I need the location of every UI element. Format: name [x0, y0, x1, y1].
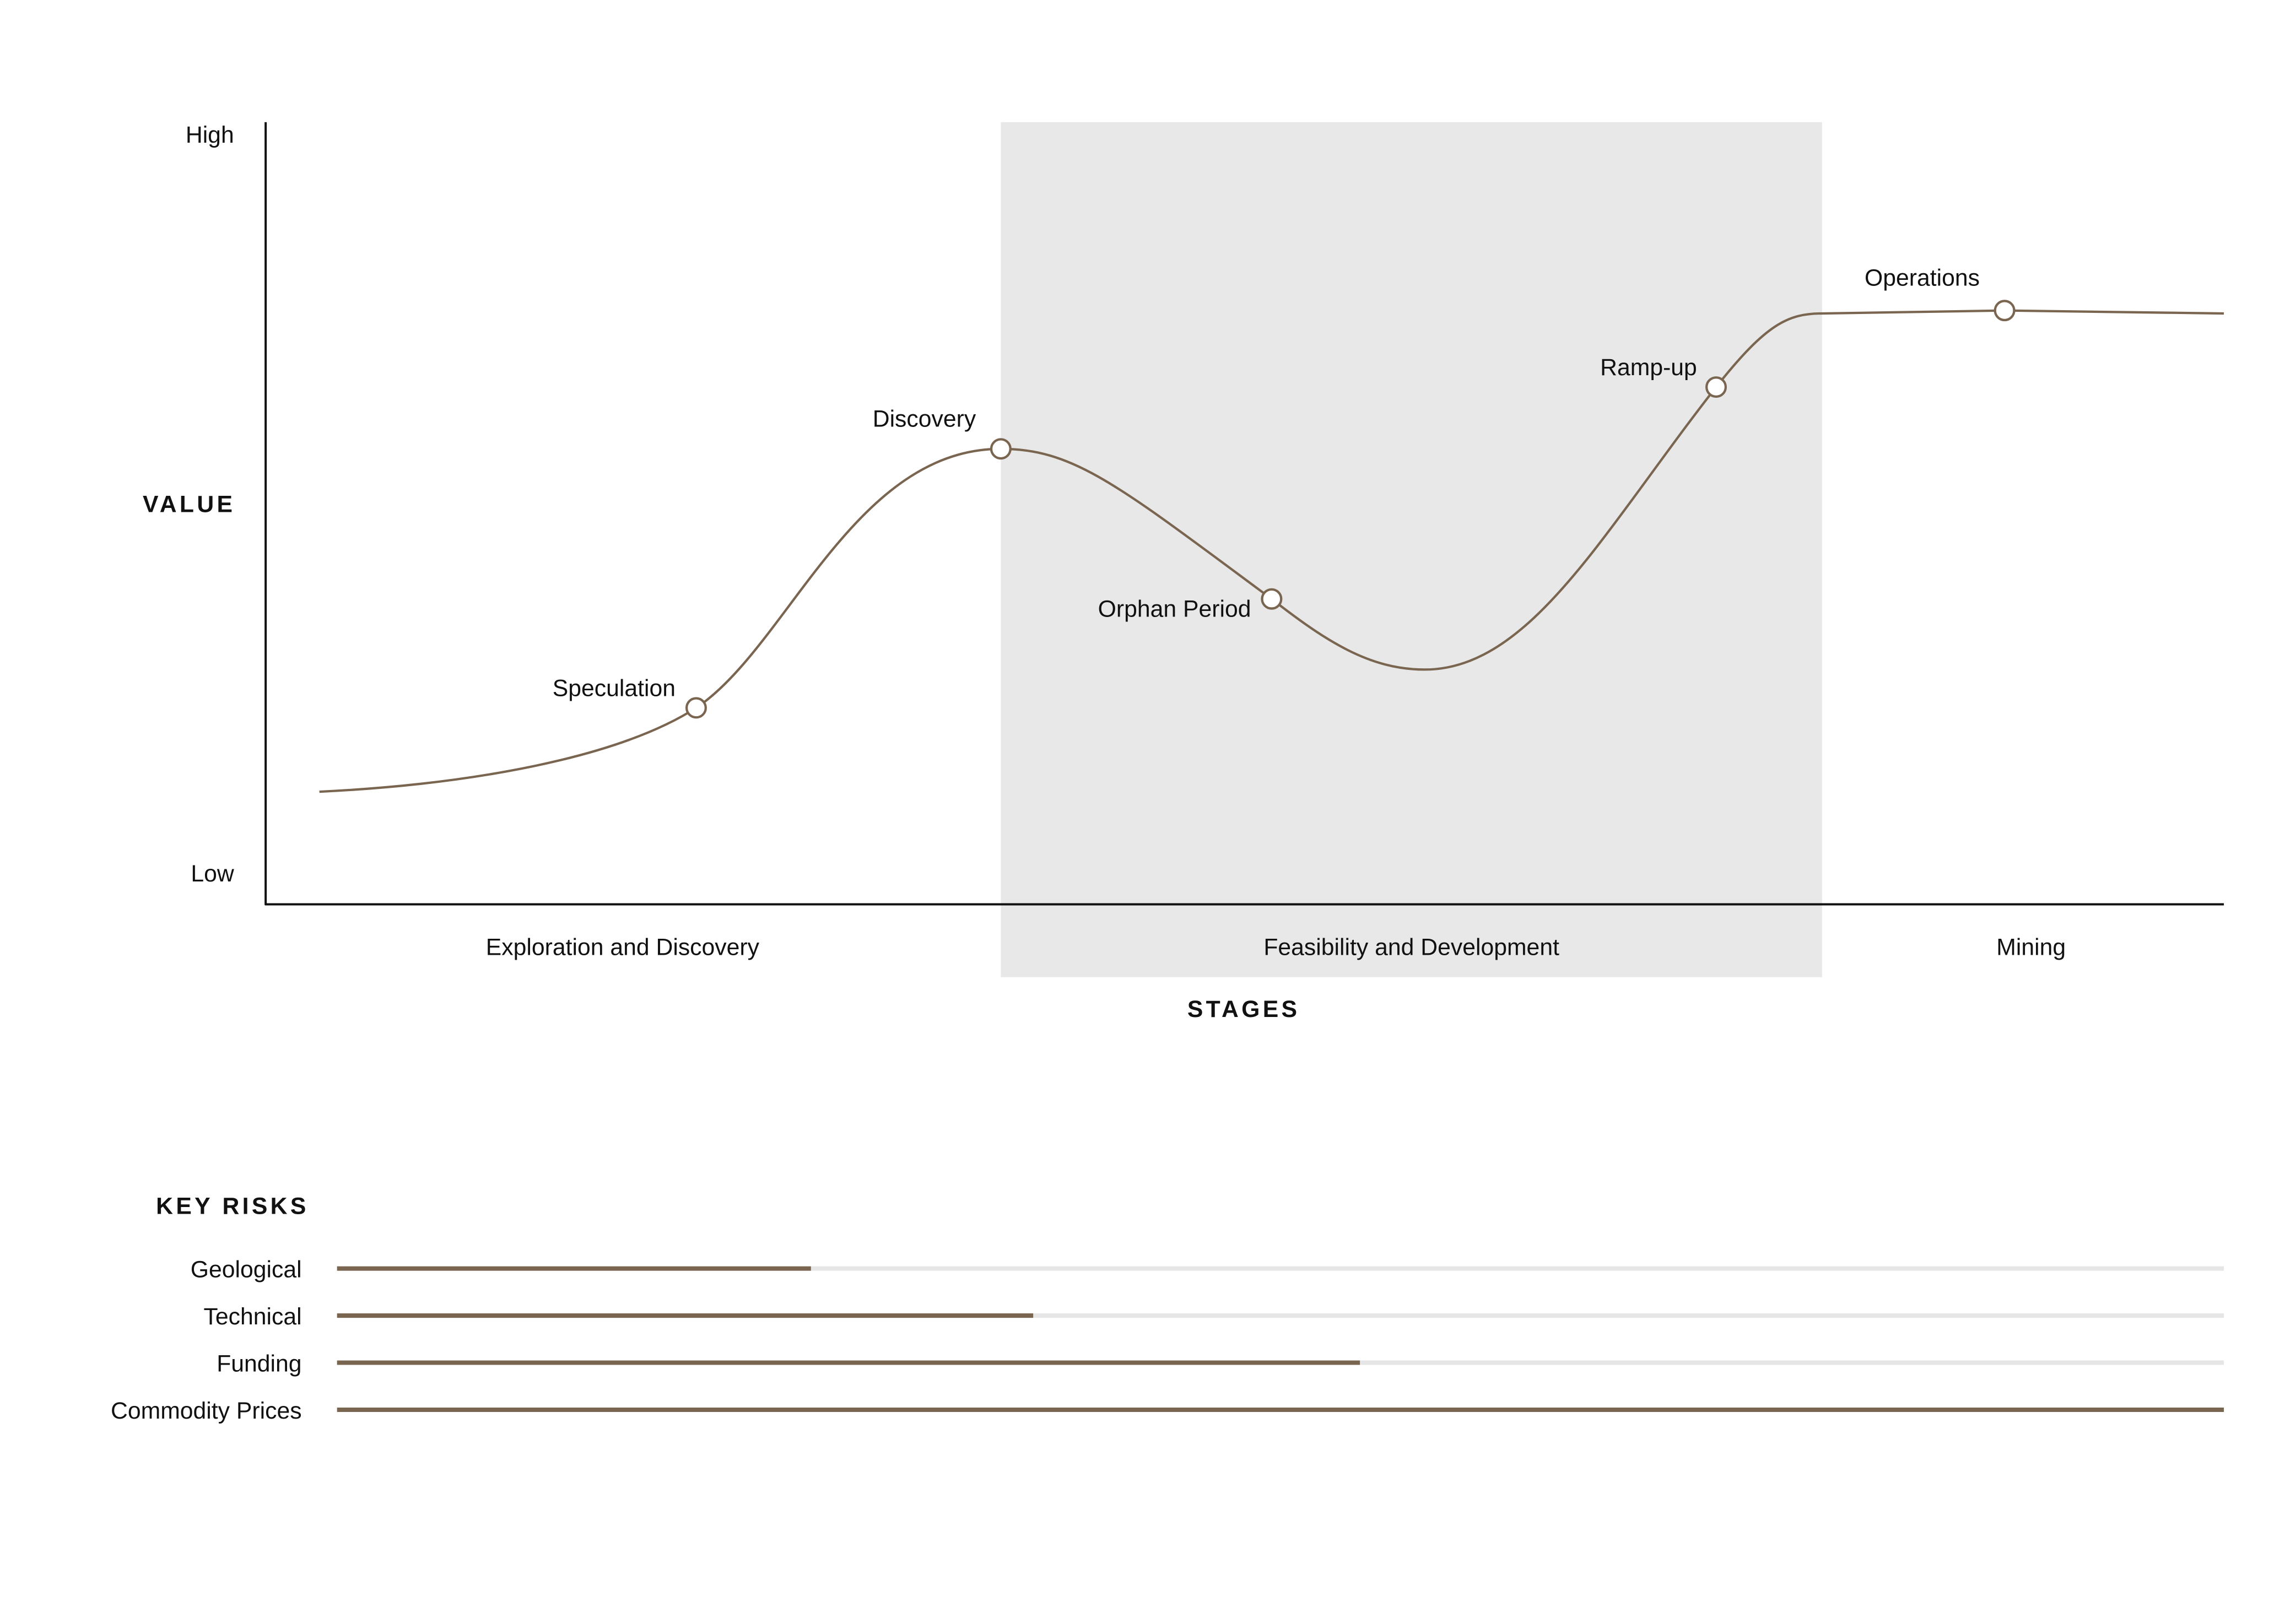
shaded stage: feasibility and development — [1001, 122, 1822, 977]
stage labels: Mining — [1996, 934, 2066, 961]
stage labels — [486, 934, 2066, 961]
milestone labels: Orphan Period — [1098, 596, 1251, 622]
key risks bars: Technical — [203, 1303, 302, 1330]
milestone labels: Operations — [1865, 264, 1980, 291]
milestone points — [687, 301, 2014, 717]
milestone labels: Ramp-up — [1600, 354, 1697, 381]
axis title: stages: STAGES — [1187, 996, 1300, 1022]
x axis — [265, 903, 2224, 905]
y axis labels: Low — [191, 861, 234, 887]
milestone labels: Discovery — [873, 406, 976, 432]
value curve — [320, 311, 2224, 792]
key risks bars — [111, 1257, 2224, 1424]
key risks bars: Commodity Prices — [111, 1398, 302, 1424]
y axis labels: High — [186, 122, 234, 148]
key risks bars: Funding — [217, 1351, 302, 1377]
stage labels: Feasibility and Development — [1263, 934, 1559, 961]
stage labels: Exploration and Discovery — [486, 934, 760, 961]
y axis — [265, 122, 266, 905]
key risks heading: KEY RISKS — [156, 1193, 309, 1220]
y axis labels — [186, 122, 234, 887]
key risks bars: Geological — [191, 1257, 302, 1283]
axis title: value: VALUE — [143, 491, 235, 518]
milestone labels — [553, 264, 1980, 702]
milestone labels: Speculation — [553, 675, 676, 702]
